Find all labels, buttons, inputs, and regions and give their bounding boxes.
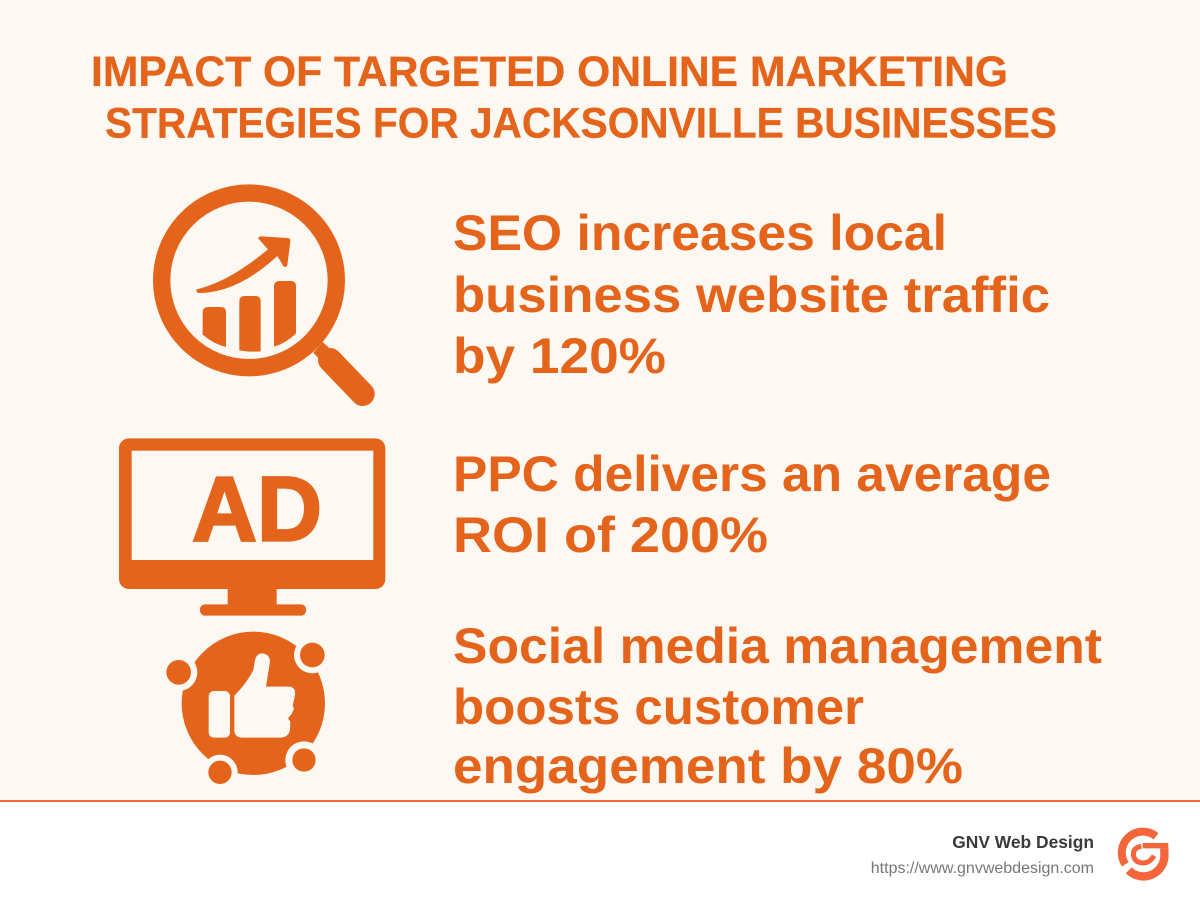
icon: magnifying glass with growth chart <box>162 193 363 394</box>
footer brand text: GNV Web Design <box>952 832 1094 852</box>
icon: monitor with AD <box>119 438 385 616</box>
text: SEO statistic: SEO increases local <box>453 204 947 261</box>
text: social media statistic: Social media management <box>453 617 1102 674</box>
text: PPC statistic: PPC delivers an average <box>453 445 1051 502</box>
title: STRATEGIES FOR JACKSONVILLE BUSINESSES <box>105 100 1057 148</box>
text: PPC statistic: ROI of 200% <box>453 506 768 563</box>
text: social media statistic: engagement by 80% <box>453 737 963 794</box>
icon: monitor with AD: AD <box>192 459 322 561</box>
title <box>91 48 1057 148</box>
text: SEO statistic: by 120% <box>453 327 666 384</box>
footer brand text: https://www.gnvwebdesign.com <box>871 860 1094 877</box>
text: SEO statistic <box>453 204 1050 384</box>
icon: thumbs up in social circle <box>160 632 331 790</box>
text: PPC statistic <box>453 445 1051 563</box>
title: IMPACT OF TARGETED ONLINE MARKETING <box>91 48 1008 96</box>
text: social media statistic: boosts customer <box>453 678 864 735</box>
text: social media statistic <box>453 617 1102 794</box>
footer brand text <box>871 832 1094 877</box>
icon: GNV logo <box>1122 832 1168 876</box>
text: SEO statistic: business website traffic <box>453 266 1050 323</box>
